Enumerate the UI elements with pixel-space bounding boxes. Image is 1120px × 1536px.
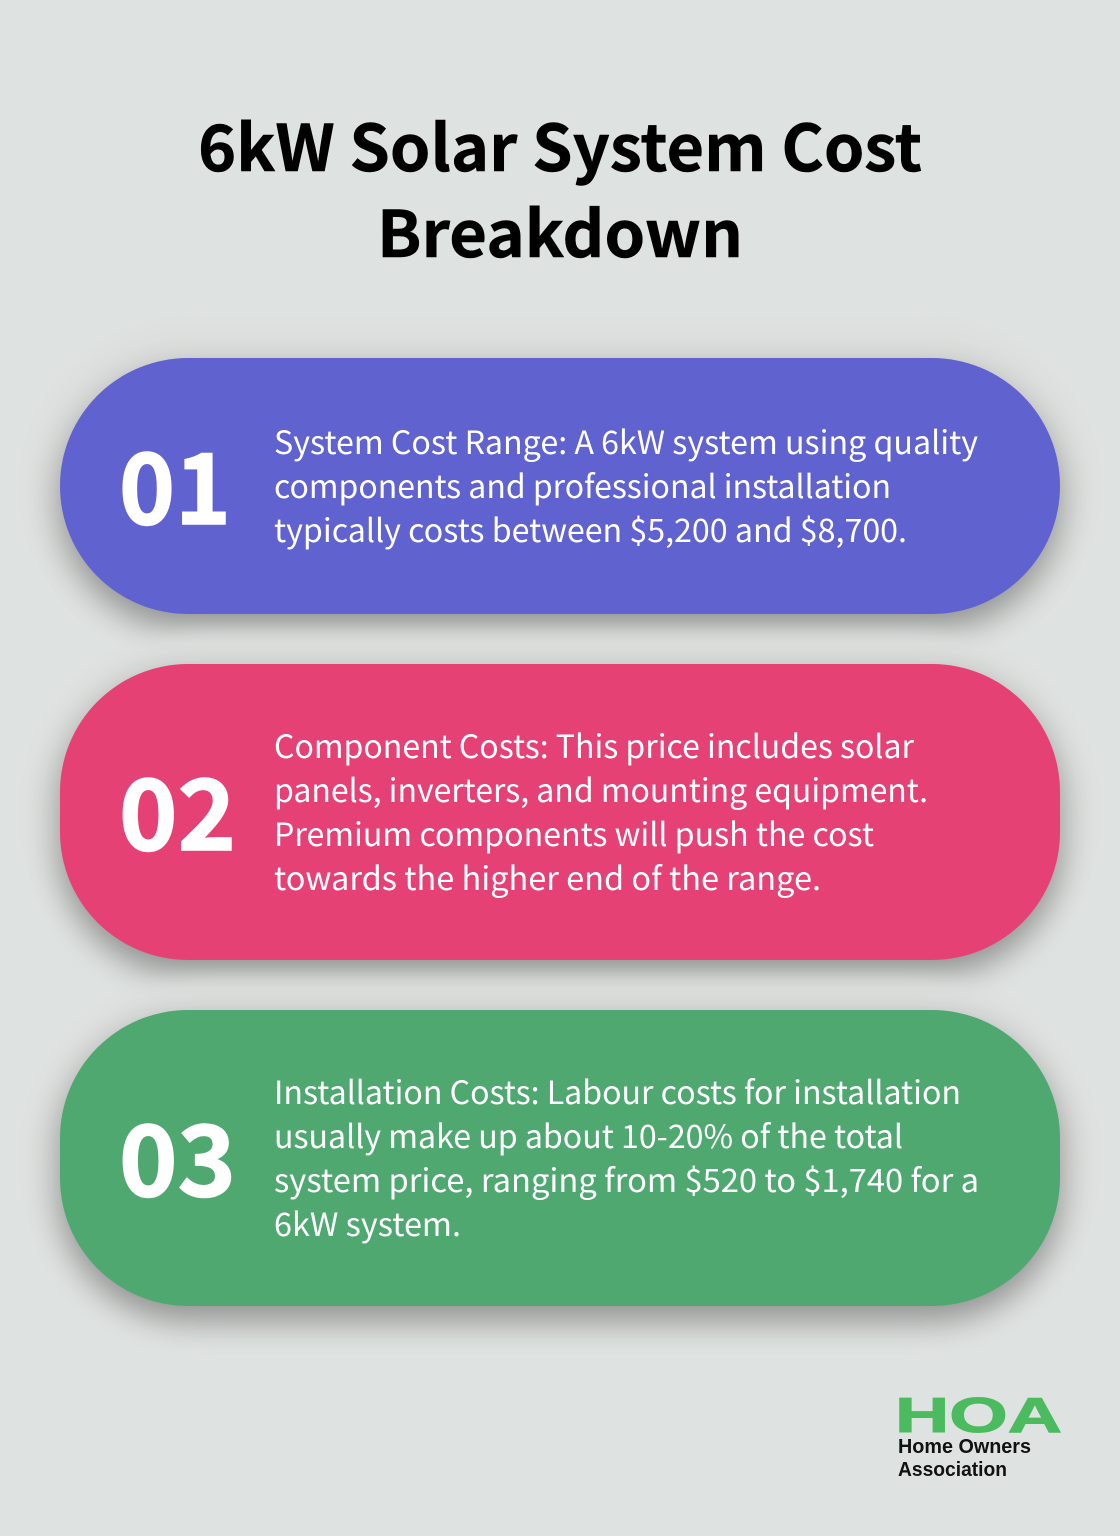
text: installation costs: usually make up about 10-20% of the total bbox=[274, 1112, 903, 1158]
number 02: 02 bbox=[119, 737, 236, 879]
title: 6kW Solar System Cost bbox=[198, 98, 922, 190]
number 01: 01 bbox=[119, 411, 231, 553]
text: system cost range: components and professional installation bbox=[274, 462, 891, 508]
text: installation costs: Installation Costs: Labour costs for installation bbox=[274, 1068, 961, 1114]
text: component costs: Premium components will push the cost bbox=[274, 810, 874, 856]
panel: component costs bbox=[30, 634, 1090, 990]
text: installation costs: 6kW system. bbox=[274, 1200, 461, 1246]
logo: HOA bbox=[895, 1389, 1062, 1481]
logo: HOA: Home Owners bbox=[898, 1436, 1031, 1458]
text: component costs: Component Costs: This price includes solar bbox=[274, 722, 915, 768]
text: system cost range: System Cost Range: A 6kW system using quality bbox=[274, 418, 978, 464]
panel: system cost range bbox=[30, 328, 1090, 644]
title bbox=[198, 98, 922, 276]
text: component costs bbox=[274, 722, 928, 900]
text: system cost range: typically costs between $5,200 and $8,700. bbox=[274, 506, 907, 552]
text: installation costs: system price, ranging from $520 to $1,740 for a bbox=[274, 1156, 979, 1202]
title: Breakdown bbox=[377, 184, 743, 276]
text: component costs: panels, inverters, and mounting equipment. bbox=[274, 766, 928, 812]
text: component costs: towards the higher end of the range. bbox=[274, 854, 821, 900]
panel: installation costs bbox=[30, 980, 1090, 1336]
number 03: 03 bbox=[119, 1083, 236, 1225]
text: installation costs bbox=[274, 1068, 979, 1246]
text: system cost range bbox=[274, 418, 978, 552]
logo: HOA: Association bbox=[898, 1459, 1007, 1481]
logo: HOA: HOA bbox=[895, 1389, 1062, 1443]
